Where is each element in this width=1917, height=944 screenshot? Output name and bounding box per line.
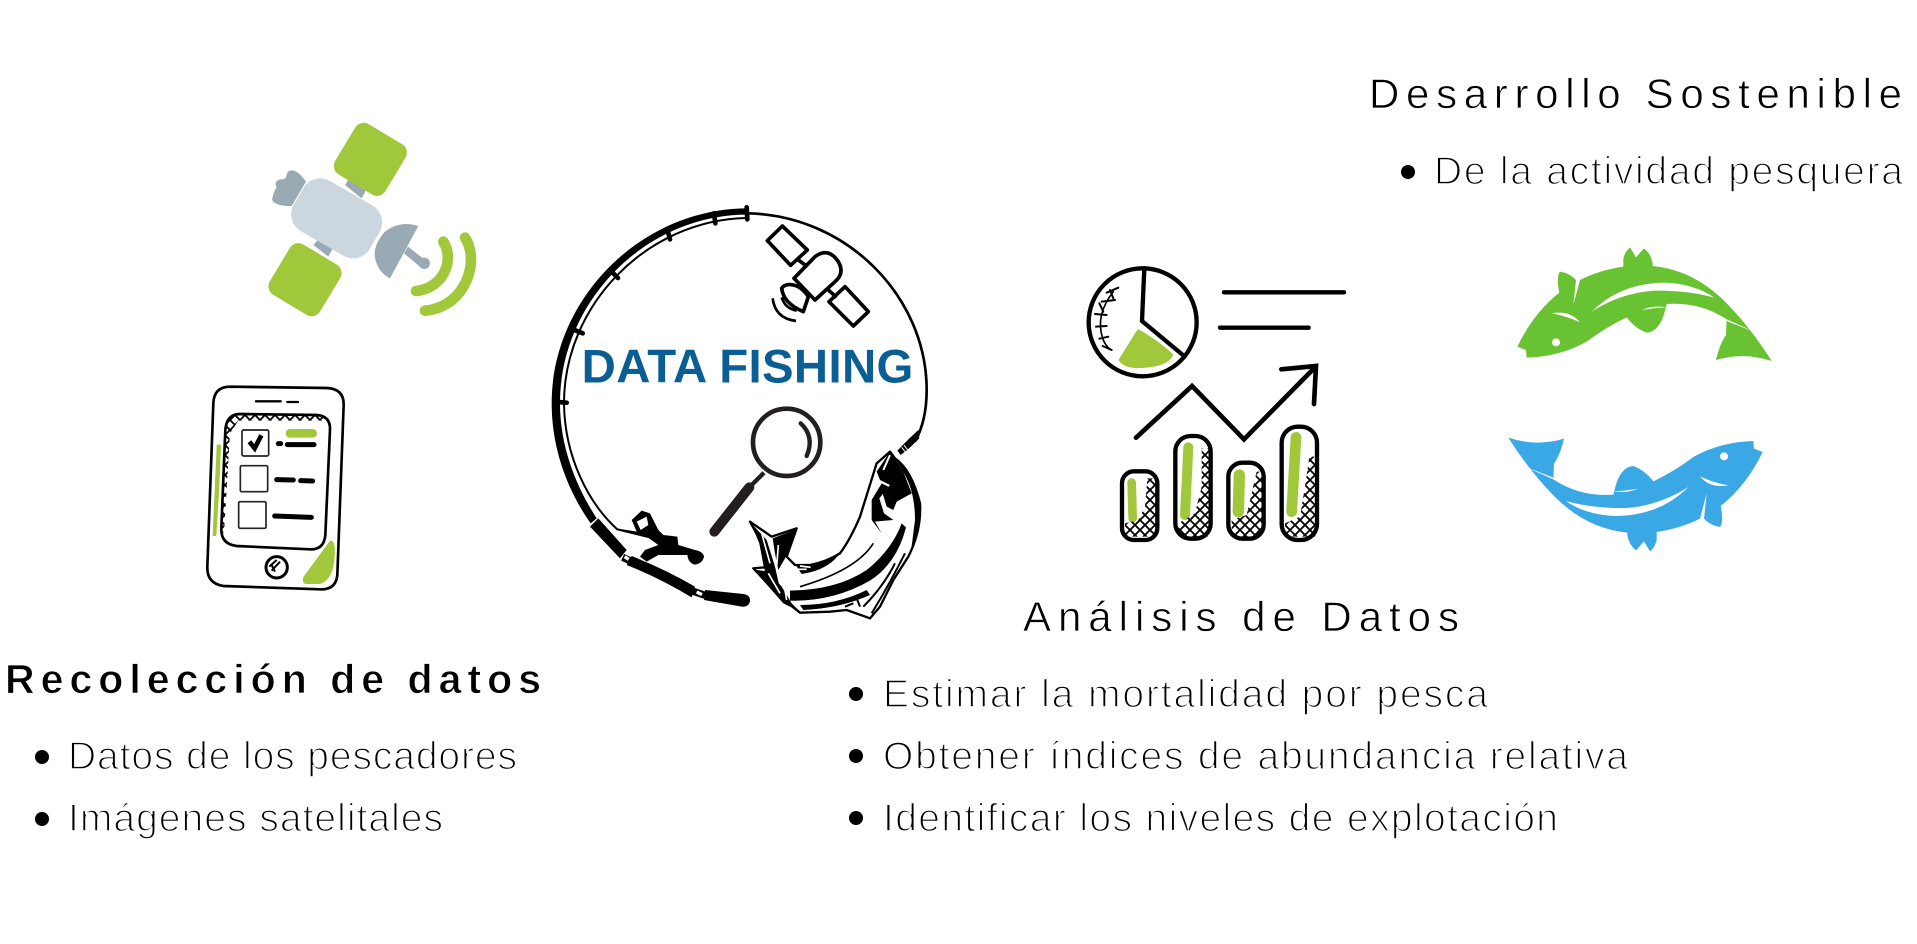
heading: Análisis de Datos (1023, 593, 1459, 640)
body stripes (790, 523, 906, 601)
tail (751, 523, 782, 597)
line tip (897, 430, 919, 455)
bar chart (1122, 427, 1317, 540)
thin line circle (747, 213, 927, 442)
reel (610, 511, 704, 565)
bullet list: Datos de los pescadores (68, 735, 517, 778)
panel: recolección de datos (5, 656, 541, 840)
bullet list: Imágenes satelitales (68, 797, 443, 840)
icon: phone with checklist (207, 387, 344, 589)
icon: analytics pie and bars (1089, 268, 1344, 540)
bullet list: Estimar la mortalidad por pesca (883, 673, 1488, 716)
fishing rod (552, 207, 750, 607)
bullet list: Identificar los niveles de explotación (883, 797, 1558, 840)
magnifying glass (714, 409, 820, 532)
bullet list: Obtener índices de abundancia relativa (883, 735, 1628, 778)
mini satellite icon (767, 226, 868, 326)
legend lines (1220, 292, 1344, 328)
heading: Desarrollo Sostenible (1369, 70, 1902, 117)
pie chart (1089, 268, 1197, 376)
icon: colour satellite (265, 119, 471, 320)
panel: análisis de datos (849, 593, 1628, 840)
logo: data fishing rod circle (552, 207, 927, 618)
DATA FISHING title: DATA FISHING (582, 341, 913, 394)
bullet list (35, 735, 517, 840)
panel: desarrollo sostenible (1369, 70, 1903, 193)
heading: Recolección de datos (5, 656, 541, 702)
trend arrow (1136, 366, 1316, 439)
hooked fish (750, 430, 920, 618)
icon: green fish (1517, 247, 1772, 361)
body (750, 452, 920, 618)
bullet list (849, 673, 1628, 840)
bullet list: De la actividad pesquera (1434, 150, 1903, 193)
icon: blue fish (1508, 438, 1763, 551)
